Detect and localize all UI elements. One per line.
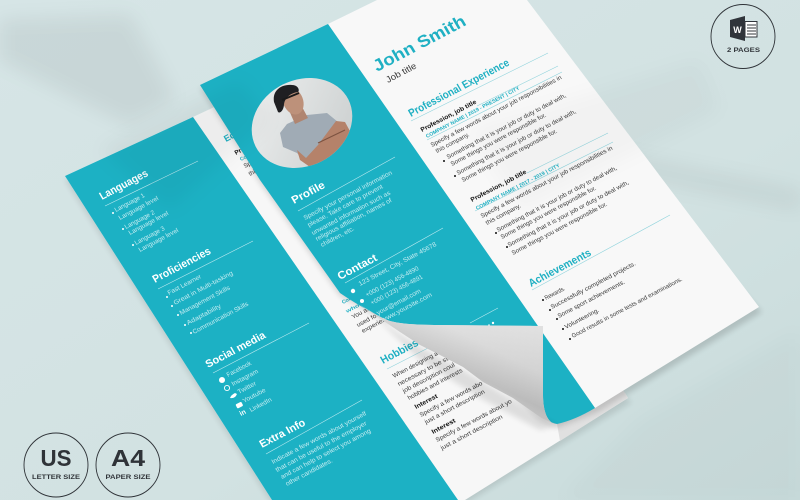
professional experience: COMPANY NAME | 2017 - 2019 | CITY bbox=[475, 163, 562, 212]
back page hobbies: Specify a few words abo bbox=[418, 380, 484, 419]
icon: linkedin: in bbox=[238, 409, 248, 418]
professional experience: Some things you were responsible for. bbox=[510, 201, 609, 257]
profile section: children, etc. bbox=[319, 225, 356, 249]
back page sheet bbox=[65, 95, 628, 500]
achievements: Good results in some tests and examinations. bbox=[570, 276, 684, 340]
front page white sheet bbox=[328, 0, 759, 408]
professional experience: Profession, job title bbox=[469, 169, 528, 204]
icon: phone bbox=[360, 299, 364, 303]
back page languages: Language 3 bbox=[133, 225, 167, 247]
panel: back resume page bbox=[65, 95, 632, 500]
back page proficiencies bbox=[150, 241, 253, 336]
professional experience: Professional Experience bbox=[406, 57, 512, 120]
back page extra info: Extra Info bbox=[257, 417, 308, 451]
contact section: your@email.com bbox=[375, 288, 422, 317]
profile photo bbox=[252, 78, 352, 168]
achievements: Successfully completed projects. bbox=[549, 260, 637, 311]
achievements: Rewards. bbox=[543, 285, 567, 302]
back page social media: Twitter bbox=[236, 380, 259, 396]
icon: word document: W bbox=[733, 25, 742, 35]
glasses bbox=[282, 93, 299, 100]
back page proficiencies: Management Skills bbox=[178, 285, 232, 317]
badge: A4 paper size: A4 bbox=[111, 445, 145, 471]
profile section: Specify your personal information bbox=[302, 169, 394, 222]
professional experience: COMPANY NAME | 2019 - PRESENT | CITY bbox=[425, 85, 521, 140]
profile section bbox=[289, 157, 395, 249]
diagonal light shadows across pages bbox=[100, 60, 720, 210]
back page main column text peeking out: who was bbox=[344, 296, 375, 315]
back page social media: LinkedIn bbox=[248, 396, 274, 414]
crossed arms bbox=[297, 121, 351, 167]
contact section: +000 (123) 456-4890 bbox=[364, 265, 421, 299]
hair bbox=[274, 85, 299, 113]
front page teal sidebar bbox=[200, 24, 595, 424]
professional experience: Something that it is your job or duty to deal with, bbox=[445, 92, 568, 161]
back page hobbies: Hobbies bbox=[378, 337, 421, 367]
profile section: Profile bbox=[289, 179, 327, 207]
professional experience: Specify a few words about your job responsibilities in bbox=[429, 74, 564, 149]
back page extra info: and can help to select you among bbox=[279, 428, 373, 481]
badge: US letter size: US bbox=[40, 445, 72, 471]
back page hobbies: Interest bbox=[430, 417, 458, 436]
icon: facebook bbox=[219, 377, 225, 383]
contact section: Contact bbox=[335, 252, 380, 283]
back page hobbies: hobbies and interests bbox=[406, 367, 464, 402]
back page hobbies: When designing a bbox=[391, 350, 440, 380]
badge: US letter size: LETTER SIZE bbox=[32, 474, 81, 481]
back page languages: Language level bbox=[127, 210, 170, 237]
back page shadow bbox=[65, 122, 632, 500]
back page hobbies: just a short description bbox=[439, 413, 505, 452]
shirt bbox=[280, 113, 345, 167]
back page main column text peeking out: You also can add bbox=[350, 291, 399, 321]
badge: A4 paper size bbox=[96, 433, 160, 497]
achievements: Volunteering. bbox=[563, 307, 601, 331]
back page main column text peeking out: used for the work bbox=[355, 299, 404, 329]
back page languages bbox=[97, 161, 198, 254]
back page social media bbox=[203, 323, 309, 418]
back page main column text peeking out: Company bbox=[239, 147, 263, 163]
panel: front resume page bbox=[200, 0, 759, 424]
professional experience: Something that it is your job or duty to deal with, bbox=[495, 165, 619, 234]
back page proficiencies: Adaptability bbox=[185, 303, 223, 327]
back page extra info: that can be useful to the employer bbox=[274, 420, 369, 474]
back page proficiencies: Great in Multi-tasking bbox=[172, 270, 235, 307]
back page main column text peeking out: Profession bbox=[233, 135, 266, 157]
back page languages: Languages bbox=[97, 168, 150, 203]
professional experience: this company. bbox=[484, 202, 523, 227]
page curl flap bbox=[360, 305, 557, 424]
back page social media: Social media bbox=[203, 329, 269, 371]
back page main column text peeking out: Education bbox=[222, 115, 265, 144]
icon: twitter bbox=[230, 393, 237, 398]
contact section: www.yoursite.com bbox=[380, 292, 434, 324]
profile section: religious affiliation, names of bbox=[314, 197, 393, 243]
professional experience: Something that it is your job or duty to deal with, bbox=[455, 108, 578, 177]
professional experience: Some things you were responsible for. bbox=[449, 112, 548, 168]
profile section: please. Take care to prevent bbox=[306, 184, 385, 229]
bottom strip of back page bbox=[557, 390, 628, 441]
achievements bbox=[526, 215, 684, 340]
badge: word document 2 pages bbox=[711, 4, 775, 68]
contact section: +000 (123) 456-4891 bbox=[369, 274, 425, 307]
professional experience: this company. bbox=[434, 131, 471, 155]
back page hobbies: Interest bbox=[413, 393, 440, 411]
back page extra info: other candidates. bbox=[284, 457, 334, 488]
professional experience: Profession, job title bbox=[419, 99, 478, 134]
back page hobbies: just a short description bbox=[423, 388, 487, 426]
back page hobbies: Specify a few words about yo bbox=[434, 398, 514, 444]
back page hobbies: job description coul bbox=[401, 362, 456, 395]
professional experience: Some things you were responsible for. bbox=[460, 128, 559, 184]
back page main column text peeking out: Company name bbox=[341, 282, 380, 306]
contact section bbox=[335, 228, 498, 326]
back page social media: Instagram bbox=[230, 368, 260, 388]
contact section: 123 Street, City, State 45678 bbox=[357, 241, 438, 288]
back page languages: Language level bbox=[137, 227, 180, 254]
profile section: unwanted information such as bbox=[310, 190, 392, 237]
professional experience: Some things you were responsible for. bbox=[499, 185, 598, 241]
shadow of front page bbox=[200, 88, 762, 428]
back page main column text peeking out: Specify bbox=[242, 154, 265, 170]
back page social media: Youtube bbox=[241, 387, 268, 405]
neck bbox=[290, 108, 308, 124]
back page main column text peeking out: experience here bbox=[360, 305, 409, 335]
name and job title: Job title bbox=[384, 61, 418, 85]
back page hobbies: necessary to be st bbox=[396, 356, 450, 388]
icon: youtube bbox=[235, 402, 243, 409]
back page sidebar bbox=[65, 117, 458, 500]
back page extra info: Indicate a few words about yourself bbox=[270, 410, 368, 466]
back page languages: Language level bbox=[117, 195, 160, 222]
badge: US letter size bbox=[24, 433, 88, 497]
back page proficiencies: Communication Skills bbox=[191, 301, 250, 336]
head bbox=[284, 92, 304, 114]
name and job title: John Smith bbox=[369, 12, 469, 75]
achievements: Some sport achievements. bbox=[556, 279, 627, 320]
shadow cast by page curl bbox=[372, 314, 557, 430]
back page main column text peeking out: this bbox=[247, 167, 260, 178]
professional experience: Something that it is your job or duty to deal with, bbox=[506, 179, 631, 249]
back page proficiencies: Fast Learner bbox=[166, 273, 204, 297]
back page languages: Language 1 bbox=[113, 192, 147, 214]
back page social media: Facebook bbox=[225, 360, 254, 379]
back page extra info bbox=[257, 400, 373, 488]
back page languages: Language 2 bbox=[123, 209, 157, 231]
back page main column text peeking out bbox=[222, 115, 409, 335]
achievements: Achievements bbox=[526, 247, 594, 290]
icon: location pin bbox=[351, 289, 355, 293]
badge: A4 paper size: PAPER SIZE bbox=[106, 474, 151, 481]
icon: instagram bbox=[224, 385, 230, 391]
professional experience bbox=[406, 53, 631, 257]
back page proficiencies: Proficiencies bbox=[150, 245, 213, 286]
back page hobbies bbox=[378, 337, 514, 452]
professional experience: Specify a few words about your job responsibilities in bbox=[479, 145, 614, 220]
badge: word document 2 pages: 2 PAGES bbox=[727, 47, 761, 54]
